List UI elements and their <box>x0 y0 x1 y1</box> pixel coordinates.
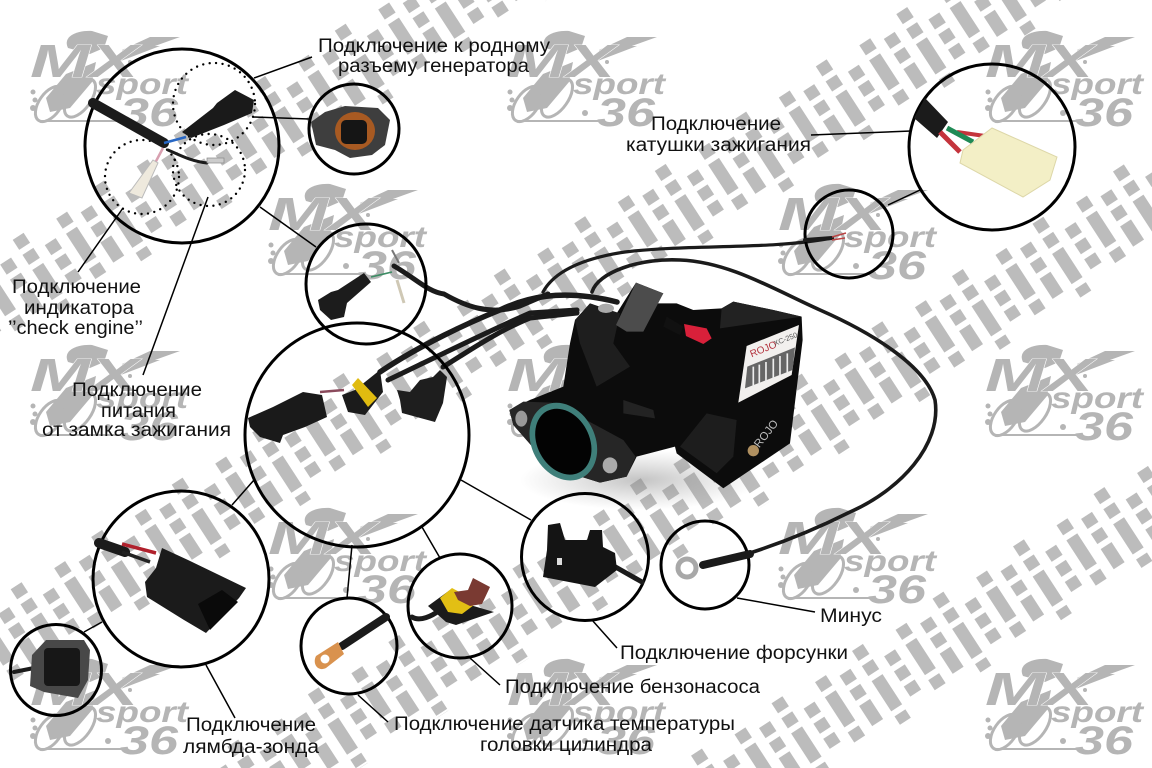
label: injector: Подключение форсунки <box>620 643 848 664</box>
panel: generator connector circle <box>309 84 399 174</box>
metal top bracket <box>616 283 663 332</box>
cable: first strand <box>380 295 617 372</box>
watermark logo 6: sport <box>96 382 190 415</box>
lug hole <box>320 654 330 664</box>
leader: temperature label <box>358 695 388 722</box>
yellow seal band <box>352 378 377 407</box>
grey shell <box>30 640 90 698</box>
leader: ignition power <box>143 197 208 375</box>
label: fuel pump: Подключение бензонасоса <box>505 677 760 698</box>
black cable <box>342 617 386 646</box>
panel: generator and indicator detail circle <box>85 49 279 243</box>
watermark logo 4: 36 <box>358 244 417 288</box>
watermark logo 12: sport <box>573 696 667 729</box>
watermark logo 3: 36 <box>1075 91 1134 135</box>
leader: generator circle to label <box>254 57 312 78</box>
crimp sleeve <box>703 554 750 565</box>
watermark logo 2: sport <box>573 68 667 101</box>
flange <box>509 402 636 483</box>
leader: ground label <box>737 598 815 612</box>
watermark logo 1 <box>30 31 190 135</box>
leader: fuel pump label <box>470 658 500 685</box>
watermark logo 7 <box>507 345 667 449</box>
watermark logo 3 <box>985 31 1145 135</box>
watermark logo 13: 36 <box>1075 719 1134 763</box>
watermark logo 5 <box>778 184 938 288</box>
label: generator connector <box>318 36 551 77</box>
black two-pin connector <box>248 392 327 443</box>
leader: injector label <box>592 620 617 648</box>
label: ignition coil: катушки зажигания <box>626 135 811 156</box>
watermark logo 5: sport <box>844 221 938 254</box>
watermark logo 5: 36 <box>868 244 927 288</box>
watermark logo 9: sport <box>334 545 428 578</box>
cable: ground lead <box>592 260 936 553</box>
label: lambda probe: Подключение <box>186 715 316 736</box>
cream connector <box>960 128 1057 197</box>
sensor bracket <box>575 303 630 387</box>
watermark logo 13: MX <box>985 663 1097 715</box>
panel: ground terminal circle <box>661 521 750 609</box>
leader: harness to lambda <box>232 480 254 505</box>
watermark logo 8 <box>985 345 1145 449</box>
watermark logo 3: sport <box>1051 68 1145 101</box>
watermark logo 8: MX <box>985 349 1097 401</box>
connector socket <box>341 120 367 144</box>
blue wire <box>164 137 186 143</box>
watermark logo 6: 36 <box>120 405 179 449</box>
watermark logo 11: 36 <box>120 719 179 763</box>
pink wire <box>320 390 344 392</box>
leader: lambda label <box>206 665 235 718</box>
watermark logo 4: MX <box>268 188 380 240</box>
panel: harness connectors circle <box>245 323 469 547</box>
watermark logo 2: 36 <box>597 91 656 135</box>
label: ignition coil: Подключение <box>651 114 781 135</box>
watermark logo 11: sport <box>96 696 190 729</box>
watermark logo 13 <box>985 659 1145 763</box>
injector connector <box>397 370 447 422</box>
cable: branch to the third circle <box>394 266 548 310</box>
ROJO embossed mark: ROJO <box>752 418 781 450</box>
watermark logo 6 <box>30 345 190 449</box>
cable end <box>805 238 832 240</box>
cable <box>412 610 440 619</box>
connector window <box>557 558 562 565</box>
label: check engine indicator: ’’check engine’’ <box>8 318 143 339</box>
label: ground: Минус <box>820 606 882 627</box>
flange hole left <box>515 411 527 427</box>
label: cylinder head temperature sensor: Подключение датчика температуры <box>394 714 735 735</box>
watermark logo 11: MX <box>30 663 142 715</box>
cable <box>99 543 125 552</box>
throttle body assembly <box>509 283 803 492</box>
label: lambda probe <box>183 715 319 758</box>
dark wire <box>122 552 150 562</box>
watermark logo 1: MX <box>30 35 142 87</box>
thick cable <box>93 103 164 143</box>
copper lug <box>315 642 344 669</box>
label: ignition lock power: питания <box>101 401 176 422</box>
thick cable stub <box>914 98 948 138</box>
watermark logo 4: sport <box>334 221 428 254</box>
leader: ignition coil label <box>811 131 911 135</box>
connector shell <box>311 106 390 158</box>
label: lambda probe: лямбда-зонда <box>183 737 319 758</box>
box lower raised part <box>680 413 737 473</box>
watermark logo 1: sport <box>96 68 190 101</box>
panel: ignition coil large circle <box>909 64 1075 230</box>
watermark logo 2: MX <box>507 35 619 87</box>
label: generator connector: разъему генератора <box>338 56 529 77</box>
cable: second strand <box>388 310 577 380</box>
watermark logo 10: MX <box>778 512 890 564</box>
pink wire <box>154 148 163 165</box>
watermark logo 8: 36 <box>1075 405 1134 449</box>
green wire <box>947 128 973 142</box>
watermark logo 7: 36 <box>597 405 656 449</box>
panel: temperature lug circle <box>301 598 397 694</box>
watermark logo 12: 36 <box>597 719 656 763</box>
lambda connector <box>145 548 246 633</box>
watermark logo 5: MX <box>778 188 890 240</box>
hose to cap <box>663 317 683 335</box>
panel: check-engine harness circle <box>306 224 426 344</box>
leader: lambda circles <box>84 622 102 632</box>
white barcode label: ROJO <box>749 339 779 360</box>
red wire lower <box>940 132 960 152</box>
label: ignition lock power: от замка зажигания <box>42 420 231 441</box>
white barcode label: XC-250 <box>772 330 799 348</box>
panel: injector circle <box>522 494 648 620</box>
wire out <box>612 565 642 582</box>
soft shadow under the throttle body <box>520 450 760 510</box>
watermark logo 10 <box>778 508 938 612</box>
socket <box>44 648 80 686</box>
watermark logo 7: MX <box>507 349 619 401</box>
watermark logo 4 <box>268 184 428 288</box>
red cap <box>684 324 712 344</box>
cables: wiring harness <box>380 238 936 553</box>
brown tip <box>454 578 490 606</box>
cable: ignition coil lead <box>543 238 832 292</box>
connector socket shade <box>198 590 238 630</box>
leader: coil circles <box>888 190 920 205</box>
panel: fuel pump circle <box>408 554 512 658</box>
leader: big circle to third circle <box>260 207 316 247</box>
watermark logo 9: MX <box>268 512 380 564</box>
clear terminal <box>129 160 158 198</box>
nozzle <box>623 400 655 418</box>
label: generator connector: Подключение к родному <box>318 36 551 57</box>
cut wires <box>832 233 846 240</box>
loose terminal <box>397 280 404 303</box>
orange seal <box>335 112 375 150</box>
seal connector body <box>342 370 383 415</box>
yellow seal <box>440 588 478 614</box>
flange hole right <box>603 457 617 473</box>
brass screw <box>748 445 759 456</box>
solid body silhouette <box>509 283 803 488</box>
box top face <box>720 302 802 328</box>
watermark logo 10: 36 <box>868 568 927 612</box>
red wire top <box>957 132 985 136</box>
watermark logo 9 <box>268 508 428 612</box>
red wire <box>122 544 156 553</box>
injector connector <box>543 523 617 587</box>
black connector <box>182 90 254 138</box>
label: cylinder head temperature sensor: головки цилиндра <box>480 735 652 756</box>
watermark logo 3: MX <box>985 35 1097 87</box>
watermark logo 12: MX <box>507 663 619 715</box>
leader: harness to injector <box>461 480 531 520</box>
watermark logo 12 <box>507 659 667 763</box>
label: check engine indicator: Подключение <box>12 277 141 298</box>
metal pin <box>207 158 224 163</box>
leader: harness to fuel pump <box>422 527 440 558</box>
watermark logo 7: sport <box>573 382 667 415</box>
label: ignition lock power <box>42 380 231 441</box>
dotted highlight circles <box>105 63 255 214</box>
watermark logo 11 <box>30 659 190 763</box>
cable: third strand <box>443 313 577 367</box>
label: cylinder head temperature sensor <box>394 714 735 756</box>
white barcode label <box>738 325 799 403</box>
black connector <box>318 273 371 320</box>
leader: check engine <box>78 208 123 272</box>
label: check engine indicator: индикатора <box>24 298 134 319</box>
watermark logo 6: MX <box>30 349 142 401</box>
panel: ignition small circle <box>805 190 893 278</box>
wire stub <box>392 250 399 263</box>
label: ignition coil <box>626 114 811 156</box>
watermark logo 2 <box>507 31 667 135</box>
teal o-ring <box>516 391 610 492</box>
watermark logo 9: 36 <box>358 568 417 612</box>
watermark logo 10: sport <box>844 545 938 578</box>
leader: generator circle to connector <box>253 117 309 119</box>
watermark logo 8: sport <box>1051 382 1145 415</box>
bolt <box>598 304 614 313</box>
green wire <box>371 272 392 277</box>
ring terminal <box>678 559 696 577</box>
panel: lambda large circle <box>93 491 269 667</box>
watermark logo 13: sport <box>1051 696 1145 729</box>
leader: harness to temperature <box>347 545 352 598</box>
label: check engine indicator <box>8 277 143 339</box>
wire <box>14 668 34 672</box>
connector body <box>428 590 494 625</box>
black wire with pin <box>168 150 207 163</box>
panel: lambda small circle <box>10 624 102 716</box>
watermark logo 1: 36 <box>120 91 179 135</box>
intake bore <box>524 399 603 484</box>
label: ignition lock power: Подключение <box>72 380 202 401</box>
leader lines <box>78 57 920 722</box>
